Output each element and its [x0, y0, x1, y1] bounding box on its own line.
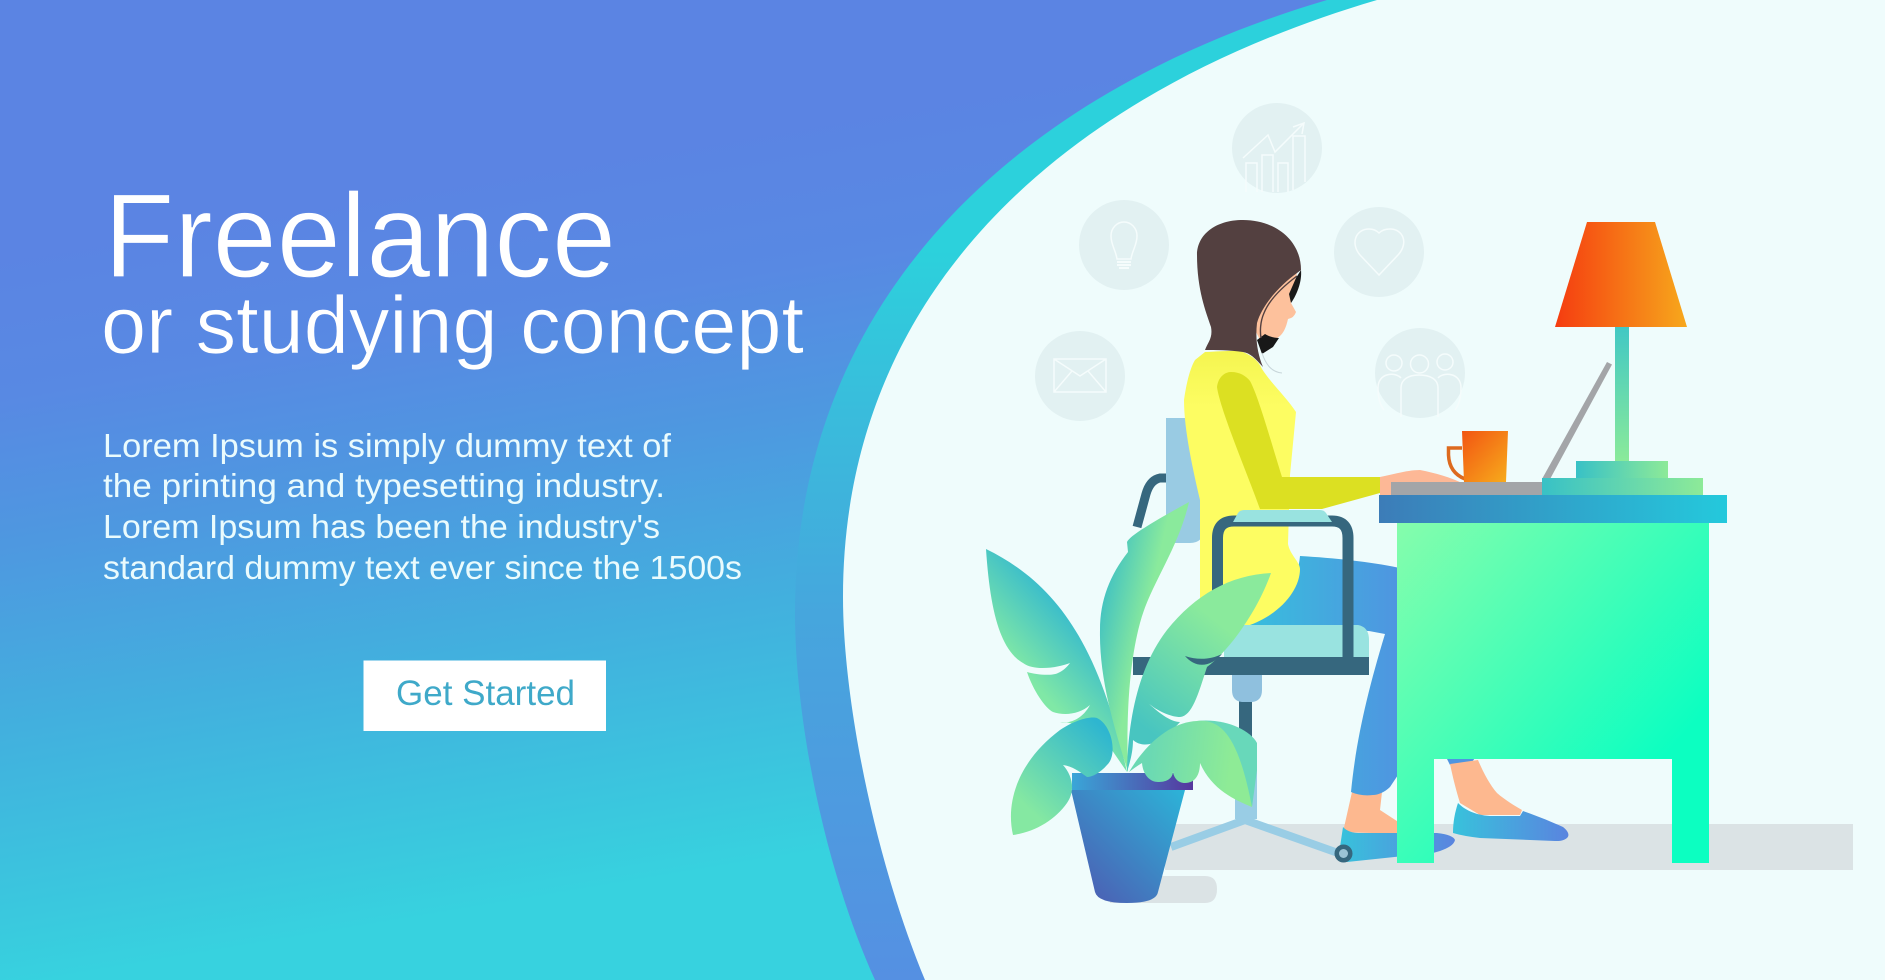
desk lamp	[1542, 222, 1703, 495]
icon: people	[1375, 328, 1465, 418]
chair	[1137, 418, 1338, 853]
chair base	[1171, 820, 1338, 853]
leaf: lower right back	[1197, 721, 1257, 807]
leaf: center tall	[1100, 502, 1189, 772]
eye lock	[1289, 270, 1301, 303]
chair post upper	[1239, 695, 1252, 740]
curved band	[0, 0, 1377, 980]
chair post lower	[1235, 743, 1257, 819]
floor shadow	[1165, 824, 1853, 870]
body text: Lorem Ipsum has been the industry's	[103, 508, 660, 545]
button: Get Started: Get Started	[396, 674, 575, 713]
leaf: top left	[986, 549, 1127, 772]
desk body and legs	[1397, 523, 1709, 863]
near leg skin	[1343, 792, 1400, 834]
body text: the printing and typesetting industry.	[103, 467, 665, 504]
icon: envelope	[1035, 331, 1125, 421]
leaf: lower left	[1011, 718, 1113, 835]
body text: standard dummy text ever since the 1500s	[103, 549, 742, 586]
near shoe	[1340, 827, 1455, 862]
chair post sleeve	[1232, 675, 1262, 702]
body text: Lorem Ipsum is simply dummy text of	[103, 427, 672, 464]
front hair strand	[1260, 276, 1297, 338]
far shoe	[1453, 803, 1568, 841]
subtitle: or studying concept	[101, 280, 804, 371]
chair backrest	[1166, 418, 1203, 543]
blue gradient panel	[0, 0, 1327, 980]
body text	[103, 427, 742, 586]
desk top	[1379, 495, 1727, 523]
armrest frame	[1218, 521, 1348, 657]
seat cushion	[1224, 625, 1369, 660]
icon: light bulb	[1079, 200, 1169, 290]
chair back support	[1137, 478, 1170, 527]
far leg skin	[1450, 760, 1522, 815]
neck shadow	[1257, 334, 1279, 354]
button: Get Started	[364, 660, 606, 731]
pot rim	[1072, 773, 1193, 790]
pot shadow	[1110, 876, 1217, 903]
arm sleeve	[1217, 372, 1380, 509]
leaf: right	[1127, 573, 1271, 772]
person	[1184, 220, 1568, 862]
face	[1250, 272, 1297, 340]
desk	[1379, 495, 1727, 863]
laptop	[1391, 362, 1612, 495]
coffee mug	[1448, 431, 1508, 482]
seat base	[1133, 657, 1369, 675]
leaf notch	[1185, 654, 1222, 665]
chair wheel	[1334, 844, 1352, 862]
thigh and shin	[1247, 556, 1400, 795]
icon: heart	[1334, 207, 1424, 297]
icon: growth chart	[1232, 103, 1322, 193]
title: Freelance: Freelance	[104, 169, 616, 303]
stray hair	[1262, 353, 1282, 373]
hair	[1197, 220, 1301, 367]
potted plant	[986, 502, 1271, 903]
armrest pad	[1233, 510, 1332, 522]
chair seat	[1133, 510, 1369, 862]
torso	[1184, 351, 1300, 626]
far leg	[1445, 755, 1477, 766]
pot body	[1071, 790, 1185, 903]
leaf: lower right	[1129, 721, 1252, 807]
hand	[1380, 470, 1464, 495]
